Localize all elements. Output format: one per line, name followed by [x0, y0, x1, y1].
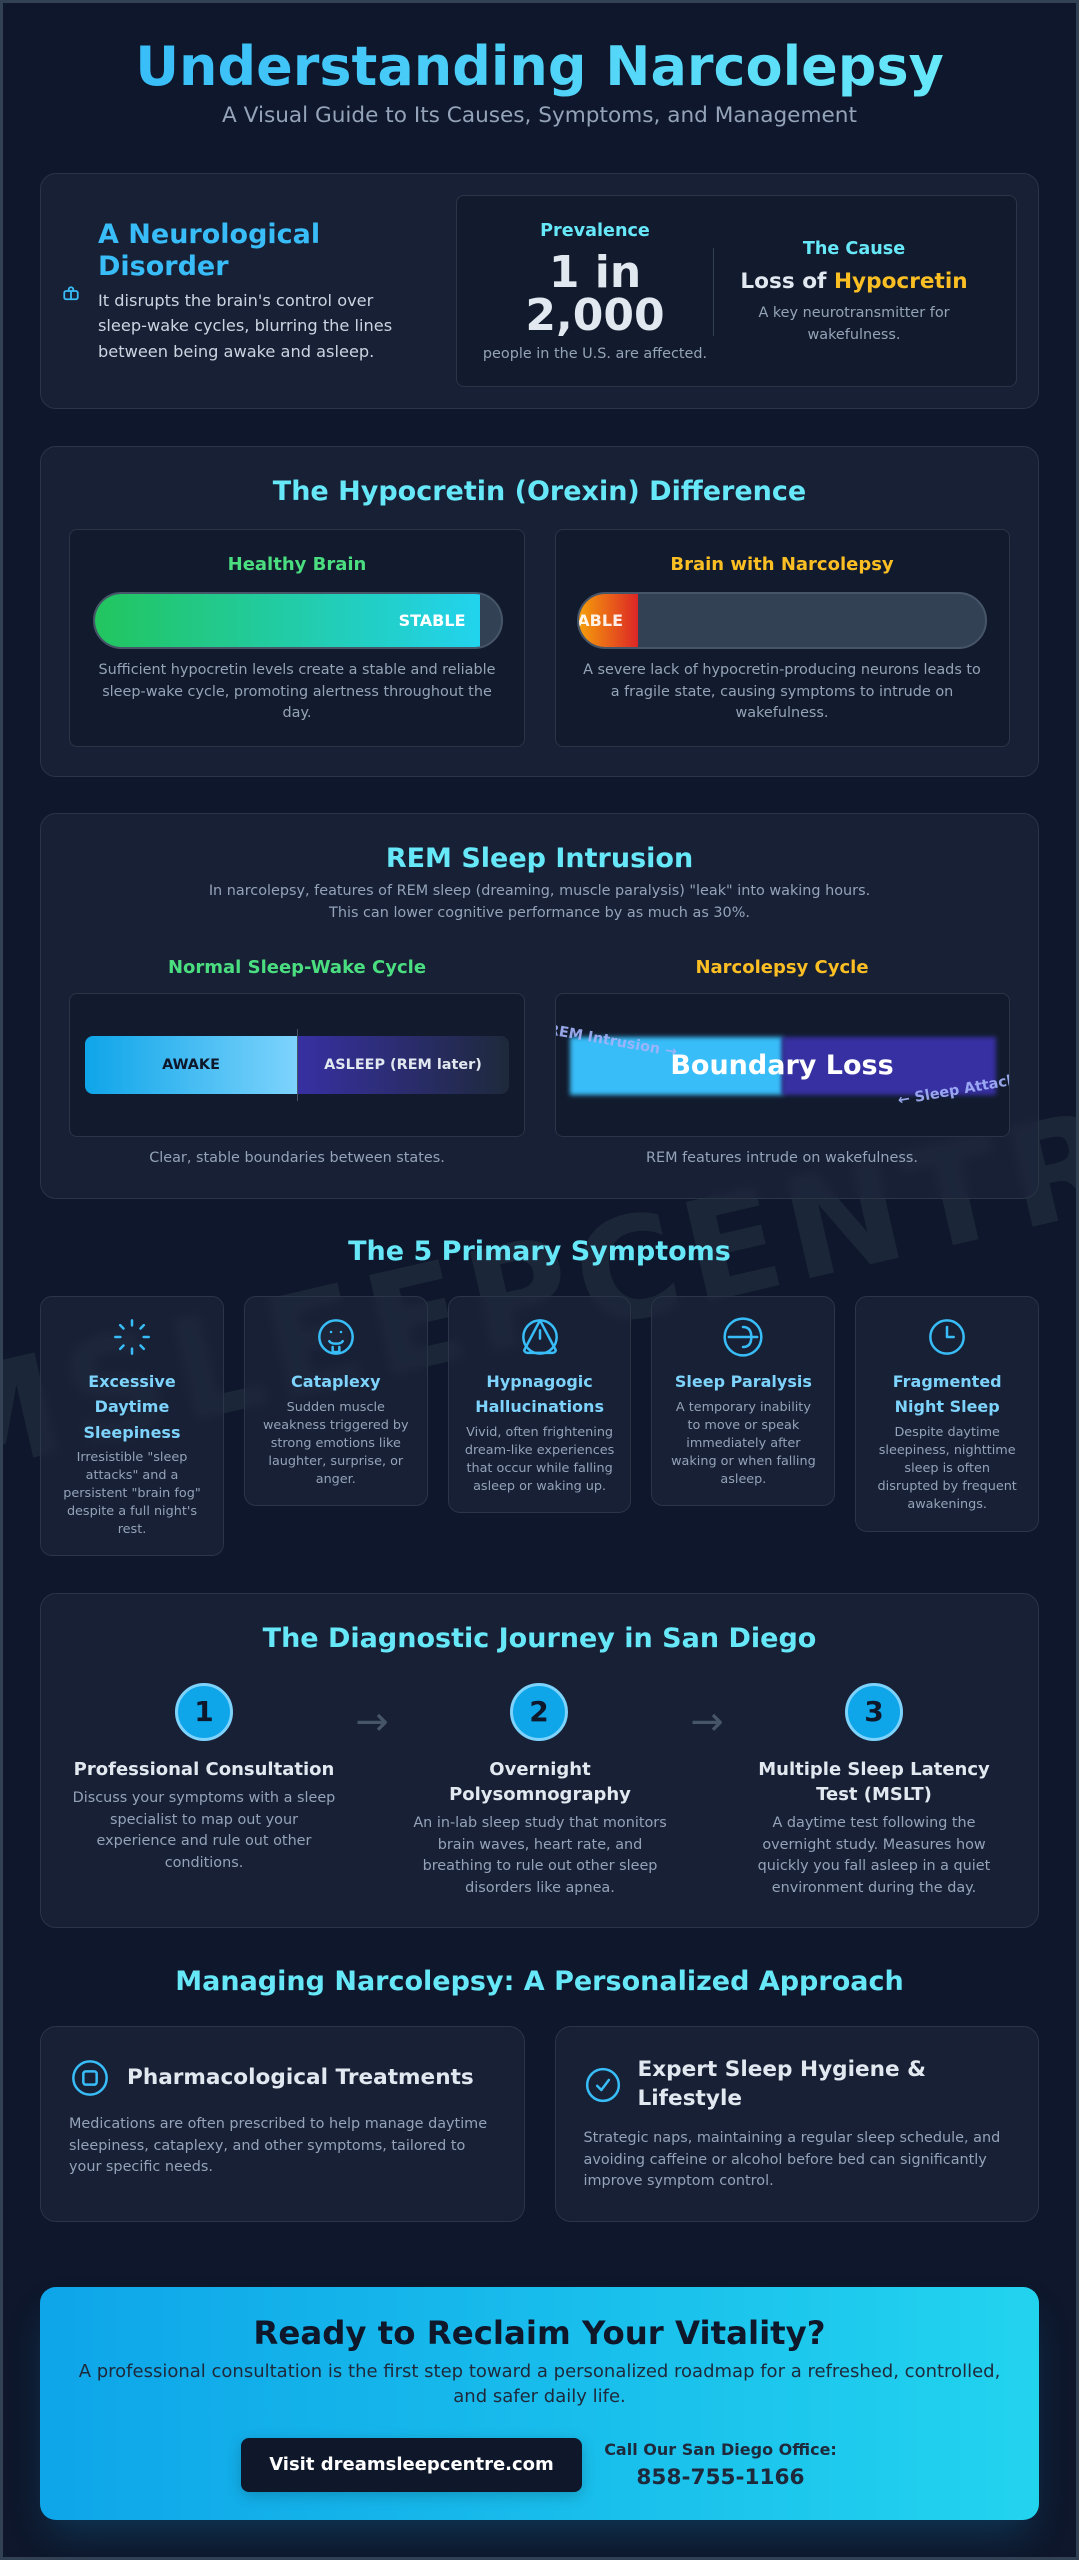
blurred awake segment	[570, 1037, 782, 1095]
text: cta description: A professional consultation is the first step toward a personalized roadmap for a refreshed, controlled,	[79, 2361, 1000, 2382]
label: the cause: The Cause	[803, 239, 905, 259]
segment: asleep	[297, 1036, 509, 1094]
text: healthy description: sleep-wake cycle, promoting alertness throughout the	[102, 684, 492, 700]
heading: diagnostic journey: The Diagnostic Journey in San Diego	[263, 1623, 816, 1654]
description: asleep or waking up.	[473, 1479, 606, 1494]
step 1 description: specialist to map out your	[110, 1812, 298, 1828]
step 3 description: quickly you fall asleep in a quiet	[758, 1858, 990, 1874]
description: immediately after	[686, 1436, 801, 1451]
description: dream-like experiences	[465, 1443, 614, 1458]
card: sleep hygiene	[554, 2026, 1039, 2222]
bar: stable: STABLE	[399, 611, 466, 630]
label: brain with narcolepsy: Brain with Narcolepsy	[670, 554, 894, 575]
description: Irresistible "sleep	[77, 1450, 187, 1465]
icon: arrow circle	[723, 1317, 763, 1357]
text: call office: Call Our San Diego Office:	[604, 2440, 837, 2459]
card: sleep paralysis	[651, 1296, 835, 1506]
title: Sleepiness	[84, 1423, 180, 1442]
card: hypnagogic hallucinations	[448, 1296, 631, 1513]
title	[893, 1372, 1002, 1416]
title: Hypnagogic	[486, 1372, 593, 1391]
icon: neurological	[63, 286, 79, 300]
text: rem description: In narcolepsy, features of REM sleep (dreaming, muscle paralysis) "leak" into waking hours.	[209, 883, 870, 899]
card: cataplexy	[244, 1296, 428, 1506]
step 2 title: Overnight	[489, 1759, 591, 1780]
title: Sleep Paralysis	[675, 1372, 812, 1391]
description: weakness triggered by	[263, 1418, 409, 1433]
stat: 1 in 2,000: 1 in	[549, 247, 641, 298]
step 2 description: brain waves, heart rate, and	[438, 1837, 642, 1853]
description: Sudden muscle	[287, 1400, 385, 1415]
description: persistent "brain fog"	[63, 1486, 201, 1501]
text: phone: 858-755-1166	[636, 2465, 805, 2490]
title	[638, 2057, 926, 2111]
description: A temporary inability	[676, 1400, 811, 1415]
description	[671, 1400, 816, 1487]
step 2 description: An in-lab sleep study that monitors	[413, 1815, 667, 1831]
title: Excessive	[88, 1372, 176, 1391]
arrow 1: →	[355, 1699, 389, 1745]
text: neurological description: sleep-wake cycles, blurring the lines	[98, 316, 392, 335]
title: Cataplexy	[291, 1372, 381, 1391]
text: narcolepsy description: wakefulness.	[736, 705, 828, 721]
step 2 number	[510, 1683, 568, 1741]
panel: hypocretin difference	[40, 446, 1039, 777]
step 2 title: Polysomnography	[449, 1784, 631, 1805]
icon: face	[318, 1319, 354, 1355]
text: narcolepsy description: a fragile state, causing symptoms to intrude on	[611, 684, 953, 700]
panel: brain with narcolepsy	[554, 529, 1010, 747]
icon: clock	[929, 1319, 965, 1355]
description: disrupted by frequent	[878, 1479, 1017, 1494]
button: visit site	[241, 2438, 582, 2492]
step 3 number: 3	[864, 1695, 884, 1728]
step 2 description: breathing to rule out other sleep	[423, 1858, 657, 1874]
description: strong emotions like	[271, 1436, 401, 1451]
segment: asleep: ASLEEP (REM later)	[324, 1057, 482, 1073]
title	[475, 1372, 604, 1416]
text: cta description	[78, 2361, 1000, 2407]
title: Night Sleep	[895, 1397, 1000, 1416]
step 1 title: Professional Consultation	[74, 1759, 334, 1780]
description: your specific needs.	[69, 2159, 213, 2175]
description: despite a full night's	[67, 1504, 197, 1519]
description: asleep.	[720, 1472, 766, 1487]
step 1 description: experience and rule out other	[97, 1833, 311, 1849]
text: rem description: This can lower cognitive performance by as much as 30%.	[329, 905, 750, 921]
step 3 title: Multiple Sleep Latency	[758, 1759, 990, 1780]
bar: stable	[92, 592, 502, 649]
description: rest.	[118, 1522, 146, 1537]
heading: symptoms: The 5 Primary Symptoms	[348, 1236, 731, 1267]
icon: pill	[72, 2060, 108, 2096]
step 1 number	[175, 1683, 233, 1741]
description	[584, 2130, 1000, 2189]
card: excessive daytime sleepiness	[40, 1296, 224, 1556]
text: neurotransmitter: A key neurotransmitter for	[758, 305, 950, 321]
text: people affected: people in the U.S. are affected.	[483, 346, 707, 362]
label: healthy brain: Healthy Brain	[228, 554, 366, 575]
description: laughter, surprise, or	[268, 1454, 403, 1469]
segment: awake: AWAKE	[162, 1057, 220, 1073]
icon: triangle alert	[522, 1319, 558, 1355]
panel: neurological disorder	[40, 173, 1039, 409]
text: boundary loss: Boundary Loss	[670, 1050, 894, 1081]
step 1 number: 1	[194, 1695, 214, 1728]
heading: hypocretin difference: The Hypocretin (Orexin) Difference	[273, 476, 806, 507]
heading: managing narcolepsy: Managing Narcolepsy: A Personalized Approach	[175, 1966, 904, 1997]
segment: awake	[85, 1036, 297, 1094]
description: Despite daytime	[894, 1425, 1000, 1440]
description: sleepiness, cataplexy, and other symptoms, tailored to	[69, 2138, 465, 2154]
heading: a neurological disorder	[98, 219, 320, 282]
description: improve symptom control.	[584, 2173, 774, 2189]
description: to move or speak	[687, 1418, 799, 1433]
arrow 2: →	[690, 1699, 724, 1745]
icon: sun spinner	[114, 1319, 150, 1355]
description: Strategic naps, maintaining a regular sleep schedule, and	[584, 2130, 1000, 2146]
description: avoiding caffeine or alcohol before bed can significantly	[584, 2152, 987, 2168]
step 2 number: 2	[529, 1695, 549, 1728]
heading: a neurological disorder: Disorder	[98, 251, 229, 282]
text: rem description	[209, 883, 870, 921]
step 3 title	[758, 1759, 990, 1805]
text: neurological description: It disrupts the brain's control over	[98, 291, 373, 310]
boundary line	[297, 1029, 298, 1101]
title: Pharmacological Treatments	[127, 2065, 474, 2090]
title: Lifestyle	[638, 2086, 742, 2111]
description: attacks" and a	[86, 1468, 178, 1483]
description	[878, 1425, 1017, 1512]
title: Understanding Narcolepsy	[135, 35, 944, 98]
description	[63, 1450, 201, 1537]
text: neurotransmitter: wakefulness.	[808, 327, 900, 343]
step 3 number	[845, 1683, 903, 1741]
caption: narcolepsy: REM features intrude on wakefulness.	[646, 1150, 918, 1166]
step 1 description	[73, 1790, 335, 1871]
description: Medications are often prescribed to help manage daytime	[69, 2116, 487, 2132]
step 3 description: A daytime test following the	[772, 1815, 976, 1831]
panel: rem sleep intrusion	[40, 813, 1039, 1199]
title	[84, 1372, 180, 1442]
button: visit site: Visit dreamsleepcentre.com	[269, 2454, 554, 2475]
text: healthy description: day.	[282, 705, 312, 721]
step 3 description	[758, 1815, 990, 1896]
heading: a neurological disorder: A Neurological	[98, 219, 320, 250]
label: prevalence: Prevalence	[540, 221, 650, 241]
heading: reclaim vitality: Ready to Reclaim Your Vitality?	[253, 2314, 826, 2352]
description	[465, 1425, 614, 1494]
divider	[713, 248, 714, 336]
blurred asleep segment	[782, 1037, 996, 1095]
card: fragmented night sleep	[855, 1296, 1039, 1532]
subtitle: A Visual Guide to Its Causes, Symptoms, and Management	[222, 103, 857, 128]
panel: diagnostic journey	[40, 1593, 1039, 1928]
step 2 title	[449, 1759, 631, 1805]
title: Expert Sleep Hygiene &	[638, 2057, 926, 2082]
text: narcolepsy description	[583, 662, 981, 721]
panel: call to action	[40, 2287, 1039, 2520]
title: Daytime	[95, 1397, 169, 1416]
description: sleepiness, nighttime	[879, 1443, 1016, 1458]
step 2 description	[413, 1815, 667, 1896]
step 3 description: environment during the day.	[772, 1880, 976, 1896]
text: loss of hypocretin: Loss of Hypocretin	[740, 269, 968, 294]
text: neurological description	[98, 291, 392, 361]
description: Vivid, often frightening	[466, 1425, 613, 1440]
text: healthy description: Sufficient hypocretin levels create a stable and reliable	[99, 662, 495, 678]
step 3 title: Test (MSLT)	[816, 1784, 932, 1805]
title: Hallucinations	[475, 1397, 604, 1416]
caption: normal: Clear, stable boundaries between states.	[149, 1150, 445, 1166]
label: normal cycle: Normal Sleep-Wake Cycle	[168, 957, 426, 978]
text: neurological description: between being awake and asleep.	[98, 342, 374, 361]
description: awakenings.	[907, 1497, 987, 1512]
panel: healthy brain	[69, 529, 525, 747]
chart: narcolepsy cycle	[554, 993, 1010, 1137]
text: narcolepsy description: A severe lack of hypocretin-producing neurons leads to	[583, 662, 981, 678]
step 2 description: disorders like apnea.	[465, 1880, 615, 1896]
title: Fragmented	[893, 1372, 1002, 1391]
panel: statistics	[456, 195, 1017, 387]
text: cta description: and safer daily life.	[453, 2386, 626, 2407]
description	[69, 2116, 487, 2175]
description: that occur while falling	[466, 1461, 613, 1476]
stat: 1 in 2,000	[525, 247, 665, 341]
label: narcolepsy cycle: Narcolepsy Cycle	[695, 957, 869, 978]
description: sleep is often	[904, 1461, 990, 1476]
chart: normal cycle	[69, 993, 525, 1137]
step 1 description: conditions.	[165, 1855, 243, 1871]
text: healthy description	[99, 662, 495, 721]
description: anger.	[316, 1472, 356, 1487]
heading: rem sleep intrusion: REM Sleep Intrusion	[386, 843, 693, 874]
description: waking or when falling	[671, 1454, 816, 1469]
bar: fragile	[577, 592, 987, 649]
text: neurotransmitter	[758, 305, 950, 343]
icon: check	[586, 2068, 620, 2102]
stat: 1 in 2,000: 2,000	[525, 290, 665, 341]
card: pharmacological treatments	[40, 2026, 524, 2222]
description	[263, 1400, 409, 1487]
step 3 description: overnight study. Measures how	[762, 1837, 986, 1853]
step 1 description: Discuss your symptoms with a sleep	[73, 1790, 335, 1806]
